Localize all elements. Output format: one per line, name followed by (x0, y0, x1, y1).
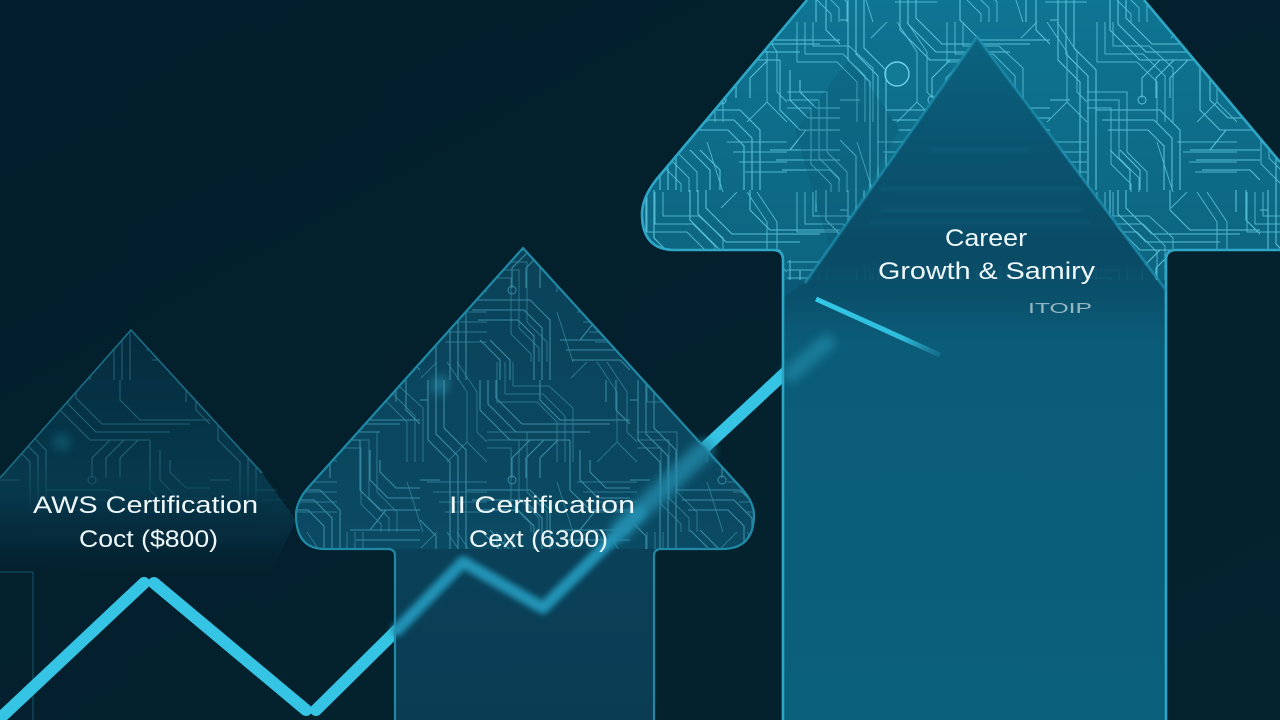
label: II certification cost (449, 492, 635, 553)
arrow: career growth and salary (640, 0, 1280, 720)
label: AWS certification cost: Coct ($800) (79, 526, 218, 553)
label: career growth and salary (878, 225, 1095, 317)
glow streak (786, 299, 940, 378)
label: II certification cost: Cext (6300) (469, 526, 608, 553)
label: career growth and salary: Career (945, 225, 1027, 252)
growth line: blurred through arrow II (397, 450, 704, 630)
label: career growth and salary: ITOIP (1028, 300, 1092, 317)
arrow: II certification (290, 245, 760, 720)
label: II certification cost: II Certification (449, 492, 635, 519)
label: AWS certification cost (33, 492, 258, 553)
arrow: AWS certification (0, 325, 300, 720)
label: AWS certification cost: AWS Certification (33, 492, 258, 519)
inner triangle of the career arrow (785, 37, 1166, 345)
label: career growth and salary: Growth & Samiry (878, 258, 1095, 285)
growth line: lower left segments (0, 372, 786, 720)
